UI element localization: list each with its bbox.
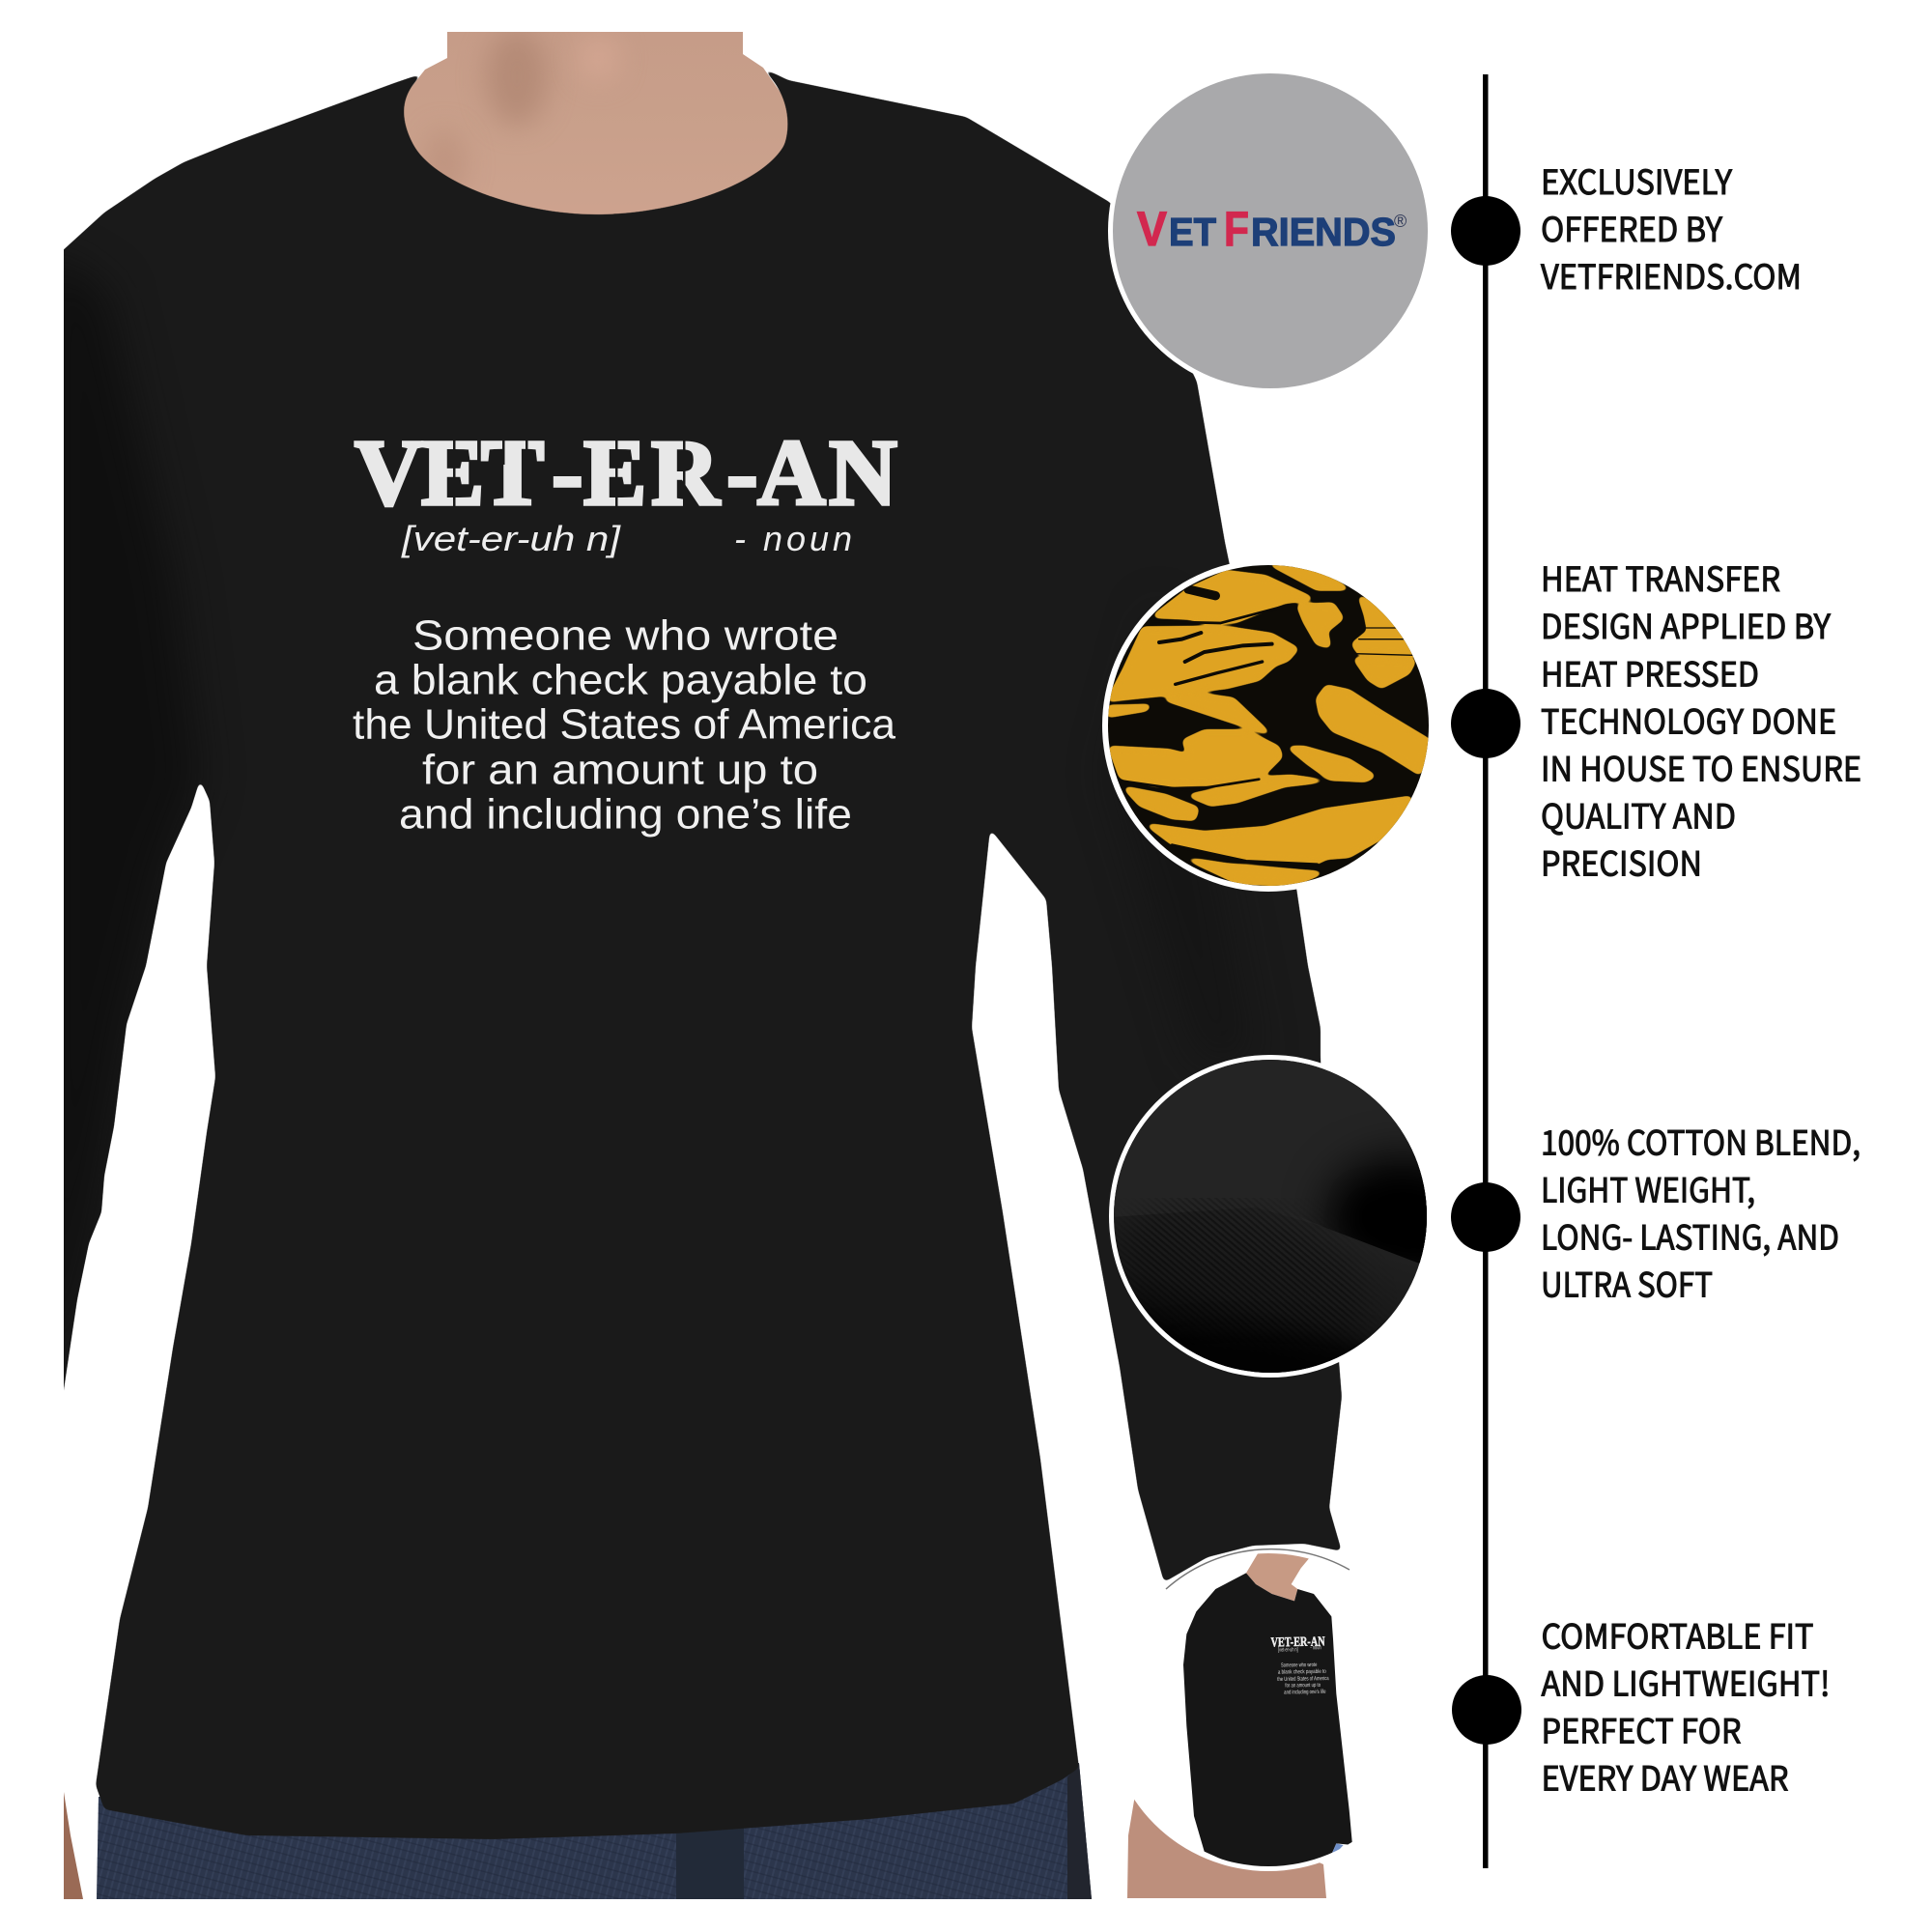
feature 3 text: LONG- LASTING, AND: [1541, 1211, 1839, 1260]
skin below circle: [1127, 1795, 1326, 1898]
pronunciation: - noun: [734, 519, 852, 558]
feature 1 text: OFFERED BY: [1541, 203, 1722, 252]
feature 2: heat transfer close-up circle: [1101, 559, 1435, 894]
small man: shirt print: and including one’s life: [1284, 1690, 1326, 1696]
feature 1 dot: [1451, 196, 1520, 266]
definition text: Someone who wrote: [412, 612, 838, 659]
feature 4 text: [1542, 1609, 1830, 1801]
feature 2 text: IN HOUSE TO ENSURE: [1541, 742, 1861, 792]
feature 4: fit circle with small man: [1127, 1548, 1352, 1898]
small man: shirt: [1183, 1573, 1352, 1872]
definition text: for an amount up to: [422, 746, 818, 794]
feature 3 text: [1541, 1117, 1861, 1308]
feature 1 text: VETFRIENDS.COM: [1541, 250, 1802, 299]
feature 2 text: PRECISION: [1541, 837, 1702, 887]
small man: shirt print: [vet-er-uh n]: [1278, 1647, 1298, 1654]
feature 3 dot: [1451, 1182, 1520, 1252]
feature 4 text: PERFECT FOR: [1542, 1704, 1741, 1754]
hand at left edge: [64, 1792, 83, 1899]
shirt print: definition of veteran: [353, 421, 897, 838]
definition text: and including one’s life: [399, 790, 852, 838]
feature 3 text: ULTRA SOFT: [1541, 1258, 1713, 1308]
logo: VetFriends: ®: [1394, 212, 1406, 231]
definition text: [353, 612, 896, 838]
small man: shirt print: VET-ER-AN: [1270, 1635, 1325, 1650]
pronunciation: [401, 519, 852, 558]
feature 2 text: TECHNOLOGY DONE: [1541, 696, 1836, 744]
small man: neck and face: [1246, 1553, 1309, 1602]
small man: shirt print: Someone who wrote: [1281, 1662, 1318, 1669]
feature 2 dot: [1451, 689, 1520, 758]
feature 1 text: [1541, 156, 1802, 299]
feature 2 text: QUALITY AND: [1541, 790, 1736, 838]
logo: VetFriends: [1137, 202, 1406, 256]
feature 4 text: EVERY DAY WEAR: [1542, 1752, 1789, 1801]
shirt shading: [39, 249, 1256, 1390]
pronunciation: [vet-er-uh n]: [401, 519, 621, 558]
feature 3 text: LIGHT WEIGHT,: [1541, 1163, 1755, 1213]
feature 4 text: COMFORTABLE FIT: [1542, 1609, 1814, 1660]
feature 3: fabric close-up circle: [1109, 1055, 1427, 1378]
small man: shirt print: - noun: [1310, 1645, 1321, 1651]
logo: VetFriends: ET: [1169, 210, 1216, 254]
shirt: [39, 65, 1342, 1839]
feature 2 text: [1541, 553, 1861, 887]
definition text: the United States of America: [353, 701, 896, 748]
feature 2 text: HEAT PRESSED: [1541, 647, 1759, 697]
logo: VetFriends: V: [1137, 202, 1168, 256]
feature 2 text: DESIGN APPLIED BY: [1541, 600, 1831, 649]
feature 4 dot: [1452, 1675, 1521, 1745]
timeline line: [1483, 74, 1488, 1868]
logo: VetFriends: RIENDS: [1251, 210, 1396, 254]
photo: man wearing black long sleeve shirt: [39, 29, 1342, 1899]
jeans: [97, 1763, 1092, 1899]
feature 3 text: 100% COTTON BLEND,: [1541, 1117, 1861, 1165]
small man: shirt print: the United States of America: [1277, 1676, 1329, 1683]
heading: VET-ER-AN: VET-ER-AN: [355, 421, 897, 526]
feature 1: logo circle: [1108, 69, 1433, 393]
neck: [404, 32, 788, 214]
small man: shirt print: for an amount up to: [1285, 1683, 1321, 1690]
small man: shirt print: a blank check payable to: [1278, 1669, 1326, 1676]
small man: shirt print: [1270, 1634, 1329, 1696]
feature 1 text: EXCLUSIVELY: [1541, 156, 1732, 205]
definition text: a blank check payable to: [374, 657, 867, 703]
feature 4 text: AND LIGHTWEIGHT!: [1542, 1658, 1830, 1706]
feature 2 text: HEAT TRANSFER: [1541, 553, 1780, 602]
logo: VetFriends: F: [1224, 202, 1249, 256]
